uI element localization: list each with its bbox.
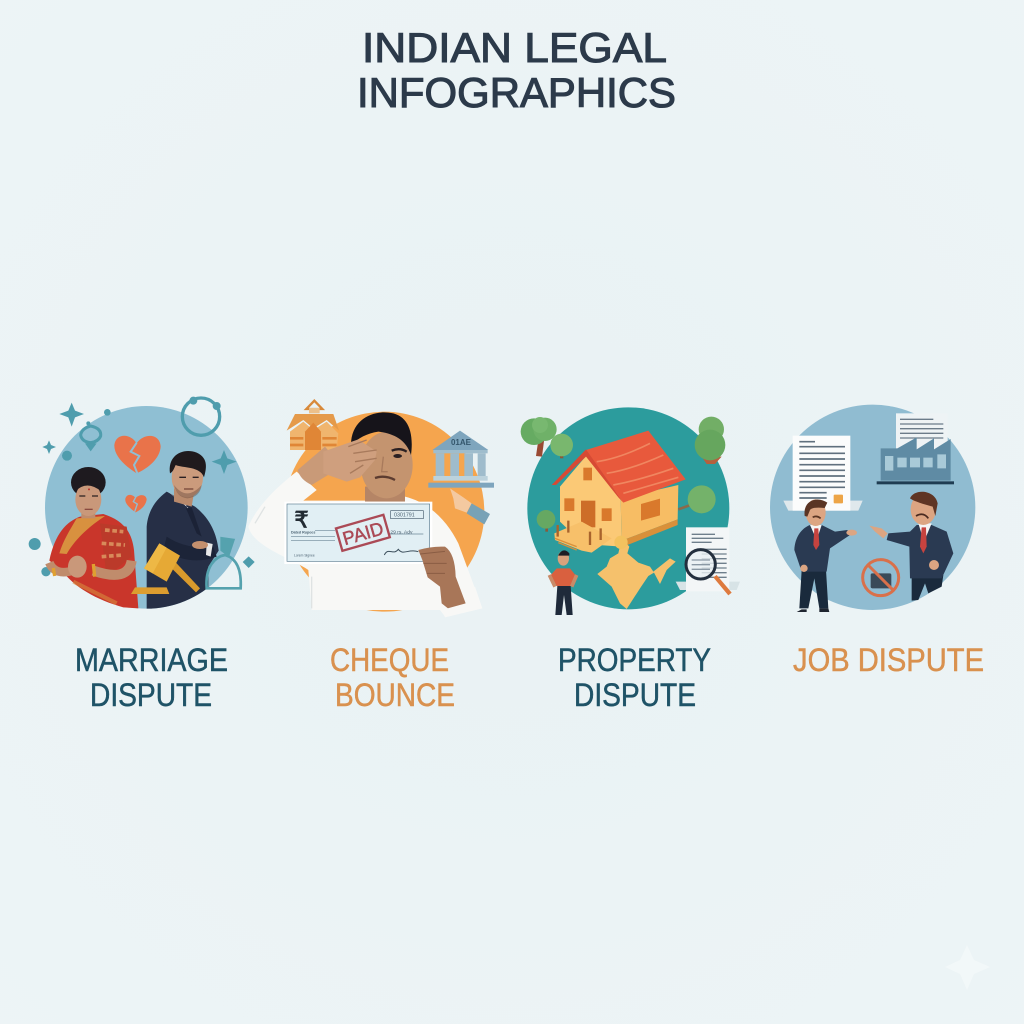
background report sheet: [896, 413, 948, 453]
man in dark suit: [147, 491, 219, 610]
icon: small broken heart: [125, 495, 147, 512]
panel: marriage dispute illustration: [29, 398, 255, 610]
label: marriage dispute: DISPUTE: [90, 677, 212, 713]
panel: cheque bounce illustration: [248, 401, 494, 617]
cheque: ₹: [294, 506, 309, 532]
hand holding cheque: [418, 547, 482, 617]
house: [552, 431, 686, 553]
label: property dispute: [558, 642, 711, 713]
woman head: [71, 467, 106, 516]
icon: prohibited sign: [863, 560, 899, 596]
man on left: [794, 499, 857, 612]
icon: big broken heart: [114, 436, 161, 473]
label: cheque bounce: CHEQUE: [330, 642, 449, 678]
location marker: [614, 536, 628, 549]
cheque: 0301791: [394, 513, 415, 519]
PAID stamp: PAID: [340, 518, 386, 549]
person: [549, 550, 577, 615]
background circle: [527, 407, 729, 609]
cheque: [284, 502, 432, 564]
trees: [521, 417, 725, 532]
icon: house: [287, 401, 339, 450]
label: job dispute: JOB DISPUTE: [793, 642, 984, 678]
decorative sparkles and dots: [29, 403, 255, 576]
icon: pointing hand: [450, 488, 490, 524]
label: marriage dispute: MARRIAGE: [75, 642, 228, 678]
icon: bank: [428, 431, 494, 488]
cheque: Dated Rupees: [291, 530, 315, 534]
panel: job dispute illustration: [770, 405, 975, 612]
background circle: [45, 406, 248, 609]
title: [357, 24, 676, 116]
icon: bank: 01AE: [451, 438, 472, 447]
document with magnifier: [676, 527, 740, 595]
label: marriage dispute: [75, 642, 228, 713]
factory: [877, 437, 954, 484]
cheque: Lorem Signee: [294, 553, 315, 557]
title: INFOGRAPHICS: [357, 69, 676, 116]
man head: [170, 451, 206, 507]
icon: faint sparkle: [945, 945, 990, 990]
man on right: [869, 492, 953, 601]
icon: bell outline: [206, 538, 241, 588]
woman in red sari: [49, 505, 138, 608]
background circle: [284, 412, 484, 612]
India map: [597, 538, 676, 609]
icon: gavel: [131, 543, 200, 594]
cheque: 29 rs. Adv: [390, 529, 413, 535]
background circle: [770, 405, 975, 610]
label: cheque bounce: [330, 642, 455, 713]
title: INDIAN LEGAL: [362, 24, 667, 71]
panel: property dispute illustration: [521, 407, 740, 615]
decorative ring: [182, 398, 220, 435]
man in white shirt: [248, 447, 482, 617]
label: property dispute: DISPUTE: [574, 677, 696, 713]
man head and raised hand: [323, 412, 413, 502]
contract document: [783, 436, 863, 511]
label: property dispute: PROPERTY: [558, 642, 711, 678]
label: cheque bounce: BOUNCE: [335, 677, 455, 713]
